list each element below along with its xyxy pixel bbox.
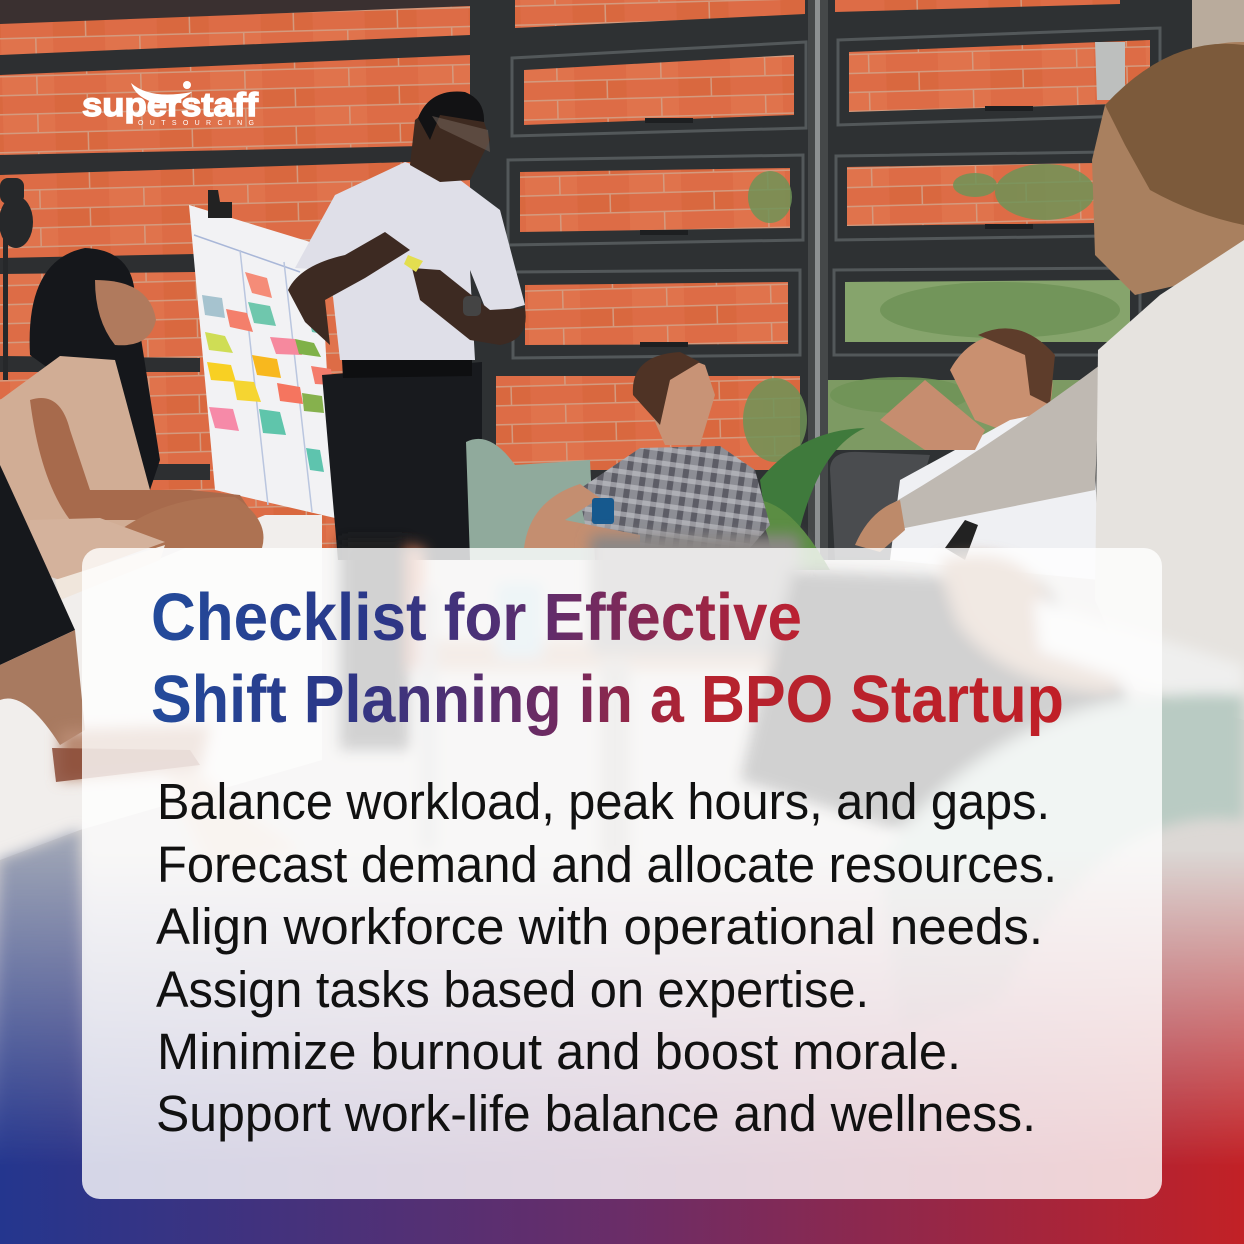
- checklist text: [156, 773, 1057, 1142]
- logo swoosh: [131, 83, 192, 103]
- carpet floor: [0, 830, 80, 1244]
- white sofa: [0, 515, 322, 860]
- window frames left: [0, 0, 470, 480]
- pale wall corner: [1190, 0, 1244, 60]
- dark centre post: [340, 540, 410, 750]
- brick wall: [0, 0, 1244, 560]
- logo tagline: OUTSOURCING: [138, 120, 254, 127]
- sticky notes: [202, 272, 333, 472]
- blurred foreground lower scene: [0, 535, 1244, 1244]
- bottom colour gradient: [0, 850, 1244, 1244]
- whiteboard with sticky notes: [189, 190, 335, 518]
- window frames right: [470, 0, 1192, 560]
- greenery: [743, 164, 1120, 462]
- seat: [880, 694, 1244, 1030]
- sandal: [52, 748, 200, 782]
- laptop: [590, 535, 800, 655]
- checklist text: Balance workload, peak hours, and gaps.: [157, 773, 1050, 830]
- mug: [497, 583, 542, 658]
- woman seated left: [0, 248, 263, 600]
- checklist text: Minimize burnout and boost morale.: [157, 1023, 961, 1080]
- table: [430, 640, 790, 670]
- heading: Checklist for Effective: [151, 580, 802, 655]
- logo: superstaff outsourcing: [82, 81, 259, 127]
- text panel: [82, 548, 1162, 1199]
- checklist text: Forecast demand and allocate resources.: [157, 836, 1057, 893]
- potted fern: [755, 428, 865, 570]
- floor lamp: [0, 178, 33, 380]
- dark legs bottom left: [0, 465, 85, 745]
- heading: Shift Planning in a BPO Startup: [151, 662, 1064, 737]
- checklist text: Assign tasks based on expertise.: [156, 961, 869, 1018]
- floor and lower room: [0, 548, 1244, 1244]
- checklist text: Support work-life balance and wellness.: [156, 1085, 1036, 1142]
- heading: [151, 580, 1064, 737]
- pale feet: [140, 720, 300, 870]
- foreground man right: [855, 42, 1244, 720]
- seated woman centre: [466, 352, 770, 560]
- logo wordmark: superstaff: [82, 86, 259, 123]
- dark trousers: [740, 570, 1130, 830]
- seated man right: [830, 328, 1100, 580]
- presenter standing: [288, 92, 526, 560]
- downpipe: [1095, 42, 1125, 100]
- checklist text: Align workforce with operational needs.: [156, 898, 1043, 955]
